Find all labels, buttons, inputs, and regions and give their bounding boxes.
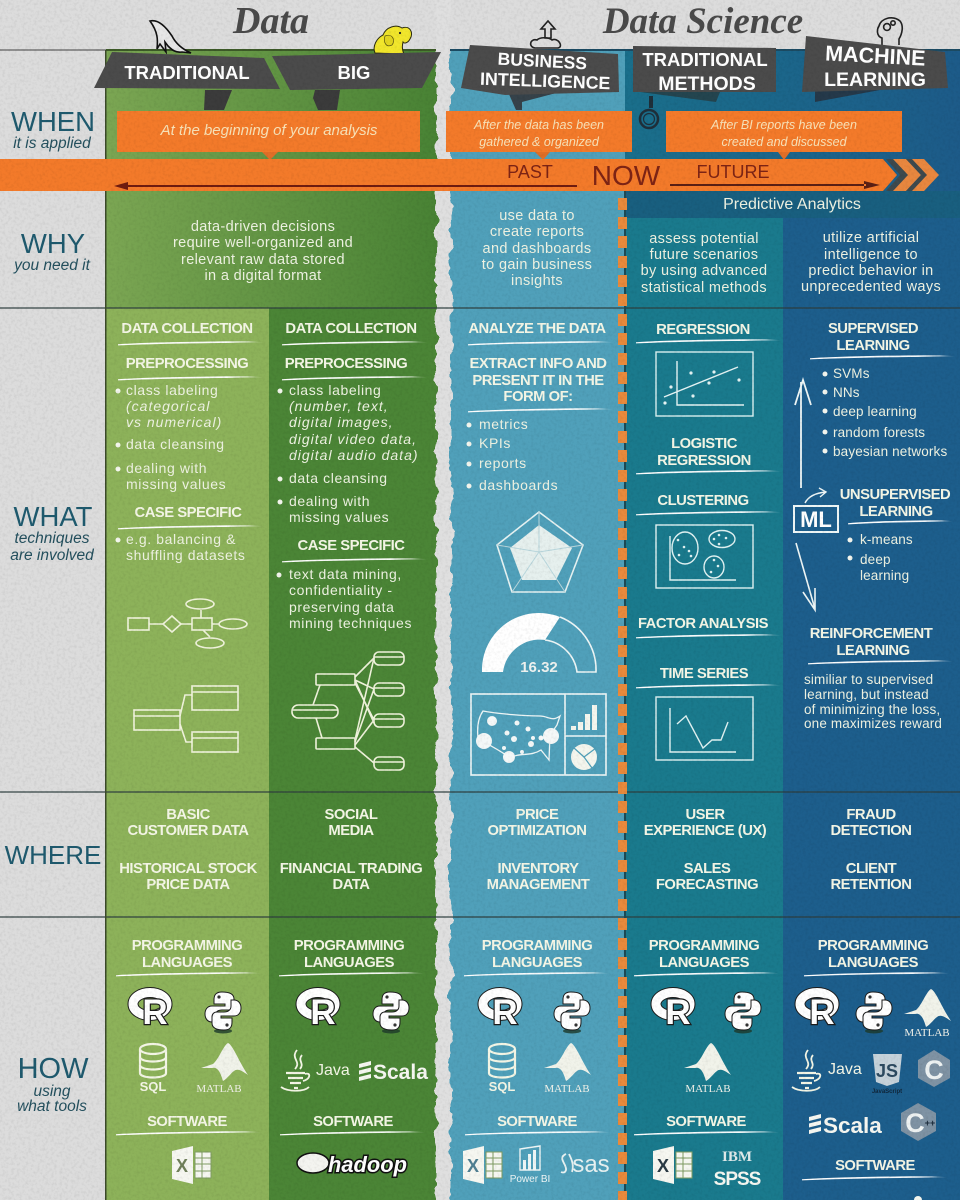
icon: IBM SPSS: IBM: [722, 1149, 752, 1165]
ribbon: machine learning: [802, 36, 948, 102]
icon: SQL: SQL: [489, 1079, 515, 1094]
why: machine learning: utilize artificial: [823, 230, 919, 246]
icon: java: Java: [828, 1061, 862, 1078]
callout: after the data: [446, 111, 632, 160]
why: business intelligence: [482, 208, 592, 289]
heading: preprocessing: PREPROCESSING: [126, 356, 248, 372]
heading: programming languages: PROGRAMMING: [818, 938, 928, 954]
why: data: in a digital format: [204, 268, 322, 284]
why: traditional methods: statistical methods: [641, 280, 767, 296]
icon: MATLAB: [196, 1043, 248, 1095]
icon: C plus plus: [901, 1103, 936, 1141]
where: traditional data: BASIC: [166, 807, 211, 823]
where: traditional methods: FORECASTING: [656, 877, 758, 893]
heading: case specific: CASE SPECIFIC: [135, 505, 242, 521]
column: data traditional and big: [106, 50, 441, 1200]
where: traditional methods: SALES: [684, 861, 731, 877]
icon: javascript: [872, 1054, 902, 1095]
where: machine learning: CLIENT: [846, 861, 897, 877]
ribbon: machine learning: LEARNING: [824, 69, 926, 91]
row label: why: you need it: [13, 257, 91, 274]
icon: IBM SPSS: [714, 1149, 761, 1190]
heading: logistic regression: LOGISTIC: [671, 436, 738, 452]
text: reinforcement description: learning, but instead: [804, 687, 929, 702]
heading: analyze the data: ANALYZE THE DATA: [468, 321, 606, 337]
bullet list: outputs: [466, 416, 558, 493]
where: business intelligence: [487, 807, 590, 893]
icon: javascript: JavaScript: [872, 1089, 902, 1095]
heading: time series: TIME SERIES: [660, 666, 749, 682]
column: business intelligence: [445, 50, 625, 1200]
what: traditional data panel: [116, 321, 263, 752]
icon: sas: sas: [572, 1151, 610, 1178]
bullet list: outputs: reports: [479, 455, 527, 471]
heading: unsupervised learning: [840, 487, 951, 520]
where: big data: [280, 807, 422, 893]
bullet list: unsupervised: k-means: [860, 532, 913, 547]
icon: C plus plus: C: [905, 1108, 925, 1138]
badge: ML: [794, 506, 838, 532]
icon: java: [281, 1050, 350, 1091]
where: traditional methods: USER: [685, 807, 725, 823]
icon: excel: [653, 1146, 692, 1184]
header band: data science top: [625, 50, 960, 218]
row label: what: are involved: [10, 547, 95, 564]
bullet: text data mining: [276, 566, 412, 631]
icon: MATLAB: MATLAB: [904, 1027, 950, 1039]
icon: excel: [172, 1146, 211, 1184]
icon: java: Java: [316, 1062, 350, 1079]
bullet list: outputs: metrics: [479, 416, 528, 432]
where: big data: DATA: [333, 877, 370, 893]
icon: excel: X: [467, 1156, 479, 1176]
callout: at the beginning: At the beginning of your analysis: [160, 122, 378, 139]
row label: how: what tools: [17, 1098, 87, 1115]
ribbon: traditional: TRADITIONAL: [124, 62, 250, 83]
arrow: to unsupervised: [805, 488, 826, 503]
heading: programming languages: LANGUAGES: [304, 955, 395, 971]
icon: MATLAB: [544, 1043, 591, 1095]
icon: python: [856, 992, 892, 1034]
bullet list: preprocessing: missing values: [126, 476, 226, 492]
icon: gauge: 16.32: [520, 659, 558, 676]
column: traditional methods: [625, 218, 783, 1200]
bullet list: supervised: bayesian networks: [833, 444, 947, 459]
bullet list: preprocessing: (categorical: [126, 398, 210, 414]
bullet list: preprocessing: missing values: [289, 509, 389, 525]
ribbon: business intelligence: INTELLIGENCE: [480, 69, 611, 93]
bullet list: preprocessing: dealing with: [126, 460, 207, 476]
ribbon: big: BIG: [338, 62, 370, 83]
heading: data collection: DATA COLLECTION: [285, 321, 417, 337]
icon: C: [918, 1050, 950, 1087]
heading: software: SOFTWARE: [313, 1114, 394, 1130]
icon: excel: X: [176, 1156, 188, 1176]
bullet list: preprocessing: digital video data,: [289, 431, 417, 447]
row label: when: it is applied: [13, 135, 92, 152]
how: big data tools: [279, 938, 428, 1177]
icon: excel: X: [657, 1156, 669, 1176]
callout: after BI reports: After BI reports have been: [710, 118, 857, 132]
heading: clustering: CLUSTERING: [657, 493, 749, 509]
heading: extract info: [470, 356, 607, 405]
chart icon: time series line: [656, 697, 753, 760]
where: business intelligence: PRICE: [516, 807, 559, 823]
ribbon: machine learning: MACHINE: [825, 41, 926, 71]
icon: R: R: [142, 993, 168, 1032]
icon: IBM SPSS: SPSS: [714, 1169, 761, 1190]
heading: software: SOFTWARE: [497, 1114, 578, 1130]
icon: MATLAB: MATLAB: [544, 1083, 590, 1095]
heading: extract info: EXTRACT INFO AND: [470, 356, 607, 372]
icon: machine learning head: [877, 18, 902, 45]
bullet list: unsupervised: learning: [860, 568, 909, 583]
bullet list: preprocessing: class labeling: [289, 382, 381, 398]
icon: python: [373, 992, 409, 1034]
heading: programming languages: [649, 938, 759, 971]
heading: programming languages: LANGUAGES: [142, 955, 233, 971]
bullet list: outputs: dashboards: [479, 477, 558, 493]
bullet: balancing: [116, 531, 246, 563]
bullet list: preprocessing: class labeling: [126, 382, 218, 398]
chart icon: clusters: [656, 525, 753, 588]
what: business intelligence panel: [466, 321, 613, 775]
heading: data collection: DATA COLLECTION: [121, 321, 253, 337]
how: traditional methods tools: [634, 938, 779, 1190]
why: data: require well-organized and: [173, 235, 353, 251]
why: business intelligence: create reports: [490, 224, 584, 240]
where: business intelligence: INVENTORY: [497, 861, 579, 877]
why: business intelligence: use data to: [499, 208, 575, 224]
icon: MATLAB: MATLAB: [196, 1083, 242, 1095]
heading: software: SOFTWARE: [147, 1114, 228, 1130]
icon: relational tables: [134, 686, 238, 752]
why: machine learning: unprecedented ways: [801, 279, 941, 295]
heading: programming languages: PROGRAMMING: [132, 938, 242, 954]
text: reinforcement description: similiar to supervised: [804, 672, 933, 687]
heading: extract info: PRESENT IT IN THE: [472, 373, 604, 389]
icon: gauge: [482, 613, 596, 676]
callout: after BI reports: created and discussed: [721, 135, 848, 149]
label: future: FUTURE: [696, 162, 770, 182]
heading: preprocessing: PREPROCESSING: [285, 356, 407, 372]
why: data: relevant raw data stored: [181, 252, 345, 268]
where: traditional data: HISTORICAL STOCK: [119, 861, 258, 877]
icon: SQL: SQL: [140, 1079, 166, 1094]
where: traditional methods: EXPERIENCE (UX): [644, 823, 767, 839]
icon: python: [554, 992, 590, 1034]
bullet list: preprocessing: vs numerical): [126, 414, 222, 430]
heading: reinforcement learning: REINFORCEMENT: [810, 626, 933, 642]
bullet list: supervised: deep learning: [833, 404, 917, 419]
how: machine learning tools: [792, 938, 951, 1200]
icon: R: R: [310, 993, 336, 1032]
predictive analytics band: Predictive Analytics: [723, 196, 861, 213]
bullet: text data mining: mining techniques: [289, 615, 412, 631]
icon: MATLAB: MATLAB: [685, 1083, 731, 1095]
arrow: to supervised: [795, 380, 811, 488]
heading: programming languages: LANGUAGES: [492, 955, 583, 971]
heading: reinforcement learning: [810, 626, 933, 659]
column: machine learning: [783, 218, 960, 1200]
where: big data: SOCIAL: [325, 807, 378, 823]
why: machine learning: predict behavior in: [808, 263, 934, 279]
bullet: text data mining: text data mining,: [289, 566, 402, 582]
torn paper divider: [436, 0, 451, 1200]
text: reinforcement description: [804, 672, 942, 731]
where: traditional data: CUSTOMER DATA: [128, 823, 249, 839]
heading: case specific: CASE SPECIFIC: [298, 538, 405, 554]
timeline arrow band: [0, 159, 939, 191]
bullet list: preprocessing: [278, 382, 419, 525]
row label: why: [13, 228, 91, 274]
heading: programming languages: LANGUAGES: [659, 955, 750, 971]
text: reinforcement description: of minimizing the loss,: [804, 702, 940, 717]
why: data: data-driven decisions: [191, 219, 335, 235]
icon: cloud upload: [531, 21, 560, 48]
row label: why: WHY: [21, 228, 85, 259]
icon: database network: [292, 652, 404, 770]
icon: C plus plus: ++: [925, 1118, 935, 1128]
icon: dashboard with map, bars, pie: [471, 694, 606, 775]
predictive analytics band: [625, 191, 960, 218]
ribbon: traditional: [94, 52, 280, 110]
when row: orange callouts: [117, 111, 902, 160]
where: big data: FINANCIAL TRADING: [280, 861, 422, 877]
row label: when: [11, 106, 95, 152]
why: traditional methods: future scenarios: [650, 247, 758, 263]
why: traditional methods: [641, 231, 767, 296]
where: business intelligence: MANAGEMENT: [487, 877, 590, 893]
heading: programming languages: PROGRAMMING: [649, 938, 759, 954]
heading: supervised learning: SUPERVISED: [828, 321, 919, 337]
icon: R: R: [492, 993, 518, 1032]
bullet list: preprocessing: data cleansing: [289, 470, 388, 486]
why: data: [173, 219, 353, 284]
callout: at the beginning: [117, 111, 420, 160]
icon: python: [205, 992, 241, 1034]
bullet list: preprocessing: (number, text,: [289, 398, 389, 414]
heading: extract info: FORM OF:: [503, 389, 573, 405]
where: machine learning: [830, 807, 912, 893]
heading: logistic regression: REGRESSION: [657, 453, 751, 469]
row label: what: [10, 501, 95, 564]
why: machine learning: intelligence to: [824, 247, 918, 263]
how: business intelligence tools: [463, 938, 610, 1185]
icon: MATLAB: [684, 1043, 731, 1095]
icon: SQL: [489, 1044, 515, 1094]
heading: unsupervised learning: UNSUPERVISED: [840, 487, 951, 503]
icon: java: [792, 1050, 862, 1091]
bullet list: supervised: random forests: [833, 425, 925, 440]
callout: after BI reports: [666, 111, 902, 160]
bullet: text data mining: preserving data: [289, 599, 395, 615]
what: machine learning panel: [794, 321, 955, 731]
badge: ML: ML: [800, 507, 832, 532]
where: business intelligence: OPTIMIZATION: [488, 823, 586, 839]
icon: python: [725, 992, 761, 1034]
what: traditional methods panel: [636, 322, 781, 760]
icon: hadoop elephant: [374, 26, 412, 54]
arrow: to reinforcement: [796, 543, 815, 610]
heading: software: SOFTWARE: [666, 1114, 747, 1130]
future arrow: [670, 181, 880, 189]
bullet list: preprocessing: data cleansing: [126, 436, 225, 452]
where: machine learning: FRAUD: [846, 807, 896, 823]
bullet list: preprocessing: dealing with: [289, 493, 370, 509]
row label: when: WHEN: [11, 106, 95, 137]
row label: how: HOW: [18, 1053, 89, 1085]
chart icon: scatter with regression line: [656, 352, 753, 416]
ribbon: traditional methods: [633, 46, 776, 102]
heading: programming languages: PROGRAMMING: [294, 938, 404, 954]
bullet list: outputs: KPIs: [479, 435, 511, 451]
icon: MATLAB: [904, 989, 951, 1039]
heading: supervised learning: LEARNING: [836, 338, 910, 354]
heading: programming languages: [132, 938, 242, 971]
row label: what: techniques: [15, 530, 90, 547]
icon: power bi: Power BI: [510, 1174, 550, 1185]
where: big data: MEDIA: [328, 823, 374, 839]
title: Data: Data: [232, 0, 309, 42]
heading: unsupervised learning: LEARNING: [859, 504, 933, 520]
bullet: balancing: e.g. balancing &: [126, 531, 236, 547]
icon: hadoop: hadoop: [328, 1152, 407, 1177]
callout: after the data: After the data has been: [473, 118, 604, 132]
bullet list: supervised: [822, 366, 947, 459]
heading: programming languages: [818, 938, 928, 971]
icon: magnifying glass: [640, 96, 658, 128]
how: traditional data tools: [116, 938, 261, 1184]
icon: power bi: [510, 1146, 550, 1185]
bullet: text data mining: confidentiality -: [289, 582, 393, 598]
icon: partial tool at page edge: [914, 1196, 922, 1200]
icon: R: R: [809, 993, 835, 1032]
ribbon: big: [272, 52, 441, 110]
icon: javascript: JS: [876, 1061, 898, 1081]
heading: supervised learning: [828, 321, 919, 354]
bullet list: unsupervised: deep: [860, 552, 891, 567]
icon: mysql dolphin: [150, 21, 191, 53]
past arrow: [114, 182, 577, 190]
bullet: balancing: shuffling datasets: [126, 547, 246, 563]
heading: software: SOFTWARE: [835, 1158, 916, 1174]
why: business intelligence: and dashboards: [483, 241, 591, 257]
bullet list: preprocessing: digital audio data): [289, 447, 419, 463]
where: traditional methods: [644, 807, 767, 893]
icon: entity relationship diagram: [128, 599, 247, 648]
bullet list: preprocessing: [116, 382, 226, 492]
why: business intelligence: to gain business: [482, 257, 592, 273]
icon: R: R: [665, 993, 691, 1032]
icon: C: C: [924, 1055, 944, 1085]
heading: programming languages: [482, 938, 592, 971]
where: machine learning: RETENTION: [830, 877, 912, 893]
callout: after the data: gathered & organized: [479, 135, 600, 149]
heading: logistic regression: [657, 436, 751, 469]
row label: where: WHERE: [5, 840, 101, 870]
row label: how: using: [33, 1083, 71, 1100]
dashed now line: [618, 191, 627, 1200]
why: traditional methods: by using advanced: [641, 263, 767, 279]
bullet list: unsupervised: [848, 532, 913, 583]
where: traditional data: PRICE DATA: [146, 877, 230, 893]
heading: factor analysis: FACTOR ANALYSIS: [638, 616, 769, 632]
text: reinforcement description: one maximizes reward: [804, 716, 942, 731]
why: machine learning: [801, 230, 941, 295]
ribbon: traditional methods: METHODS: [658, 73, 756, 95]
bullet list: preprocessing: digital images,: [289, 414, 394, 430]
row label: what: WHAT: [14, 501, 93, 532]
why: traditional methods: assess potential: [649, 231, 759, 247]
icon: SQL: [140, 1044, 166, 1094]
title: Data Science: Data Science: [602, 1, 803, 42]
what: big data panel: [276, 321, 427, 770]
icon: excel: [463, 1146, 502, 1184]
why: business intelligence: insights: [511, 273, 563, 289]
row label: how: [17, 1053, 89, 1115]
label: past: PAST: [507, 162, 553, 182]
heading: regression: REGRESSION: [656, 322, 750, 338]
bullet list: supervised: NNs: [833, 385, 860, 400]
heading: programming languages: [294, 938, 404, 971]
heading: programming languages: LANGUAGES: [828, 955, 919, 971]
where: machine learning: DETECTION: [830, 823, 912, 839]
icon: radar chart: [497, 512, 583, 592]
label: now: NOW: [592, 160, 661, 191]
icon: scala: Scala: [823, 1113, 882, 1138]
icon: scala: Scala: [373, 1061, 428, 1084]
heading: programming languages: PROGRAMMING: [482, 938, 592, 954]
heading: reinforcement learning: LEARNING: [836, 643, 910, 659]
bullet list: supervised: SVMs: [833, 366, 870, 381]
ribbon: business intelligence: BUSINESS: [497, 49, 588, 73]
ribbon: business intelligence: [461, 45, 619, 110]
where: traditional data: [119, 807, 258, 893]
ribbon: traditional methods: TRADITIONAL: [642, 49, 768, 70]
